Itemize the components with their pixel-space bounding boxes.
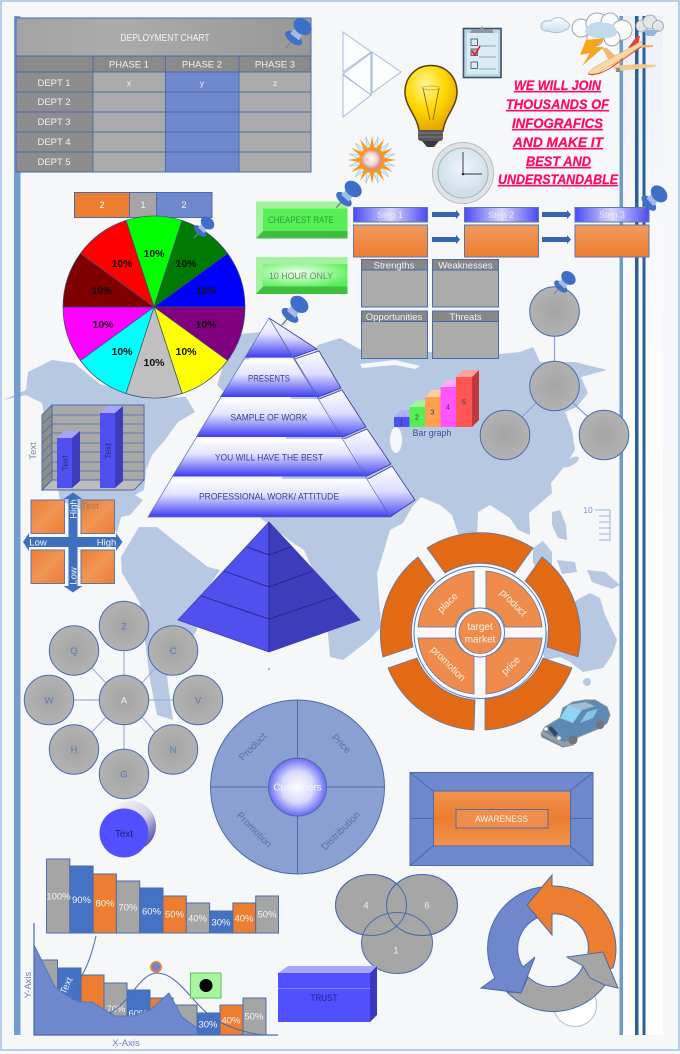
process steps [354,208,649,257]
SWOT grid: Threats [449,312,482,323]
target market ring diagram [380,533,580,730]
deployment chart table: DEPT 4 [37,137,71,148]
customers wheel: Price [329,732,353,756]
area and column combo chart: Y-Axis [23,971,34,998]
3D bar graph: 1 [400,420,404,426]
icon: pin on button [329,177,365,214]
area and column combo chart: 30% [198,1020,218,1030]
deployment chart table: DEPT 5 [37,157,71,168]
area and column combo chart [23,923,278,1049]
cross matrix: Low [29,538,47,548]
left vertical bar [14,16,20,1035]
3D bar graph: 5 [462,400,466,406]
customers wheel: Customers [273,782,322,794]
SWOT grid [362,260,498,358]
awareness nested box [410,772,593,866]
button: cheapest rate: CHEAPEST RATE [268,215,334,226]
stacked proportion bar: 2 [181,200,187,211]
trust 3D box: TRUST [310,993,338,1004]
deployment chart table: PHASE 2 [182,60,222,70]
large 3D pyramid: YOU WILL HAVE THE BEST [215,452,323,464]
triangles cluster [343,32,401,117]
cross matrix: Text [81,501,99,512]
pie chart: 10% [143,248,165,260]
customers wheel: Promotion [234,810,274,850]
large 3D pyramid [148,318,415,517]
title text: WE WILL JOIN [514,77,602,93]
3D bar graph: 3 [431,410,435,416]
target market ring diagram: product [497,588,529,619]
target market ring diagram: market [465,634,496,646]
pie chart: 10% [175,258,197,270]
large 3D pyramid: SAMPLE OF WORK [230,412,308,424]
pie chart: 10% [143,357,165,369]
percentage bar chart: 30% [211,918,231,928]
area and column combo chart: 60% [128,1008,148,1020]
area and column combo chart: 70% [106,1004,126,1015]
venn diagram: 4 [363,900,369,912]
percentage bar chart: 80% [95,898,115,910]
pie chart: 10% [175,346,197,358]
deployment chart table [16,18,311,172]
trust 3D box [278,966,377,1022]
icon: clouds [541,13,664,46]
hub and spoke diagram: Q [70,646,78,657]
venn diagram: 1 [393,946,399,956]
area and column combo chart: 50% [244,1012,264,1022]
icon: pin on pyramid [274,292,312,331]
percentage bar chart: 70% [118,902,138,914]
awareness nested box: AWARENESS [475,814,528,825]
deployment chart table: x [127,78,132,88]
title text: INFOGRAFICS [512,115,604,131]
icon: sun [343,131,401,189]
icon: clock [432,142,494,204]
3D bar graph: 4 [446,404,450,412]
hub and spoke diagram: Z [121,622,127,632]
pie chart: 10% [111,258,133,270]
right side white strip [623,16,663,1035]
ruler scale: 10 [583,505,593,515]
percentage bar chart: 100% [46,892,71,902]
title text: BEST AND [526,153,591,169]
icon: pin on steps [634,182,671,218]
area and column combo chart: X-Axis [112,1038,140,1049]
percentage bar chart [46,859,278,933]
world map background [3,332,620,720]
process steps: Step 2 [488,210,514,220]
small blue pyramid [178,522,360,670]
3D bar graph: Bar graph [413,428,451,438]
customers wheel [210,700,384,874]
target market ring diagram: promotion [428,645,467,684]
icon: light bulb [405,66,457,147]
hub and spoke diagram: G [120,770,128,780]
title text: AND MAKE IT [512,134,604,150]
deployment chart table: DEPT 2 [37,97,71,108]
deployment chart table: z [273,78,277,88]
3D column chart: Text [28,442,39,460]
venn diagram [336,874,458,974]
org tree circles [480,287,629,460]
venn diagram: 6 [424,900,430,912]
pie chart: 10% [111,346,133,358]
cross matrix: High [68,499,80,519]
SWOT grid: Weaknesses [438,260,493,272]
icon: pin on org tree [548,268,578,299]
percentage bar chart: 40% [234,914,254,924]
3D bar graph: 2 [415,414,419,422]
deployment chart table: DEPLOYMENT CHART [120,33,210,44]
deployment chart table: y [200,78,205,88]
hub and spoke diagram: A [121,696,128,706]
icon: clipboard [464,26,501,78]
button: cheapest rate [256,202,348,238]
text sphere: Text [115,829,133,840]
3D column chart: Text [103,443,113,459]
stacked proportion bar: 1 [140,200,146,211]
percentage bar chart: 40% [188,914,208,924]
title text: UNDERSTANDABLE [498,171,619,187]
customers wheel: Product [237,731,269,763]
percentage bar chart: 90% [72,895,92,906]
percentage bar chart: 50% [165,910,185,920]
SWOT grid: Strengths [374,260,415,272]
deployment chart table: PHASE 3 [255,60,295,70]
hub and spoke diagram: W [45,696,54,706]
cross matrix [23,492,122,592]
button: 10 hour only: 10 HOUR ONLY [269,271,334,282]
customers wheel: Distribution [320,810,363,853]
3D bar graph [394,370,479,438]
title text [498,77,619,187]
pie chart: 10% [195,319,217,331]
area and column combo chart: 40% [221,1016,241,1026]
icon: car [541,700,610,747]
pie chart: 10% [195,285,217,297]
deployment chart table: DEPT 1 [37,78,71,89]
hub and spoke diagram: V [195,696,202,706]
process steps: Step 3 [599,210,625,220]
text sphere [100,801,156,858]
percentage bar chart: 60% [142,906,162,918]
hub and spoke diagram: N [170,745,177,756]
cross matrix: High [97,538,116,548]
target market ring diagram: price [500,654,523,678]
3D column chart: Text [60,455,70,471]
cross matrix: Low [68,567,80,585]
hub and spoke diagram: C [170,646,177,657]
process steps: Step 1 [377,210,403,220]
SWOT grid: Opportunities [366,312,422,323]
area and column combo chart: Text [58,975,76,996]
percentage bar chart: 50% [257,910,277,920]
icon: pin on table [278,15,315,54]
pie chart: 10% [91,285,113,297]
right vertical lines [620,16,646,1035]
hub and spoke diagram [24,601,223,799]
stacked proportion bar: 2 [99,200,105,211]
cycle arrows [481,875,618,1026]
large 3D pyramid: PROFESSIONAL WORK/ ATTITUDE [199,492,339,502]
target market ring diagram: place [436,591,461,616]
icon: pin on pie chart [188,214,217,243]
pie chart: 10% [92,319,114,331]
icon: airplane and lightning [580,36,656,76]
button: 10 hour only [256,257,348,294]
deployment chart table: DEPT 3 [37,117,71,128]
hub and spoke diagram: H [71,745,78,756]
target market ring diagram: target [467,622,493,633]
3D column chart [28,405,144,490]
deployment chart table: PHASE 1 [109,60,149,70]
ruler scale [583,505,610,541]
large 3D pyramid: PRESENTS [248,374,290,384]
pie chart [63,216,245,398]
title text: THOUSANDS OF [506,96,609,112]
stacked proportion bar [74,192,212,218]
